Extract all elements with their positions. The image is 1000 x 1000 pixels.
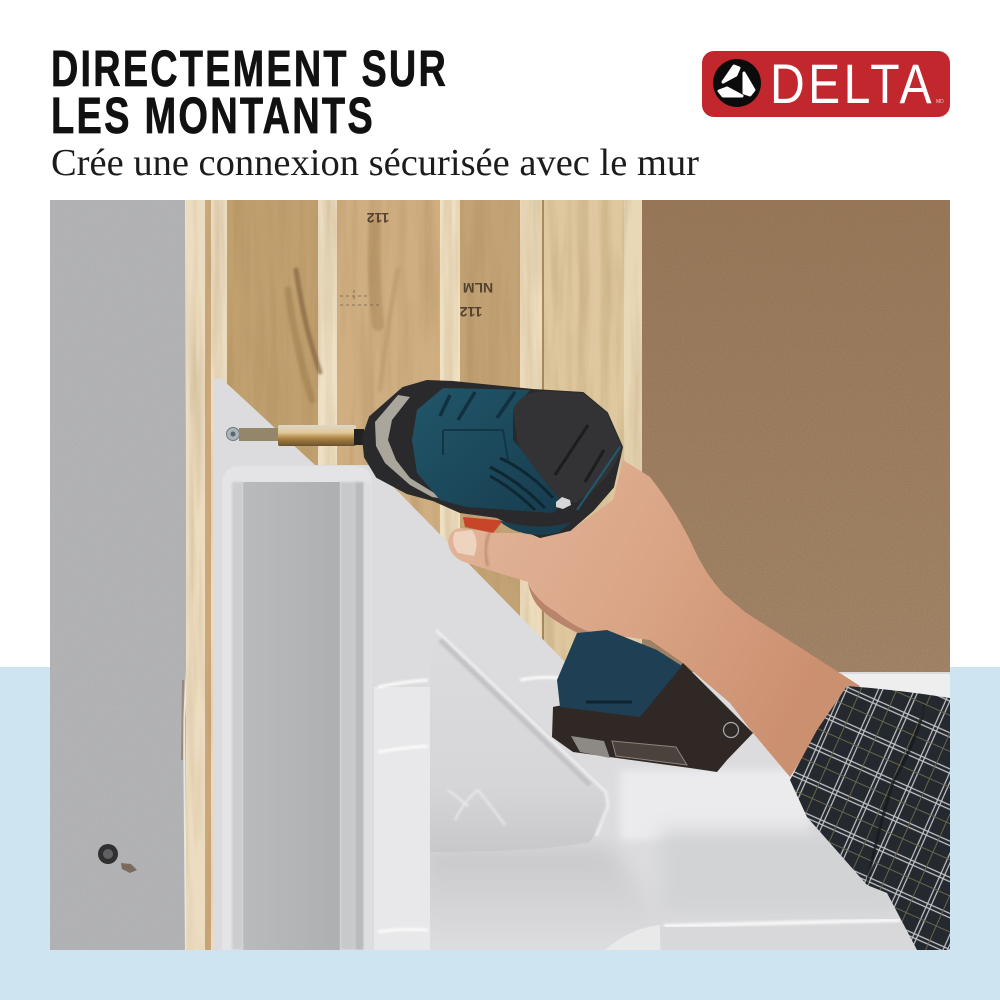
title: LES MONTANTS <box>51 87 375 144</box>
drywall screw <box>98 844 137 873</box>
title <box>51 40 448 144</box>
black rear cap <box>513 391 622 503</box>
tile highlight lines <box>378 677 560 932</box>
drywall panel <box>50 200 190 950</box>
plaid shirt sleeve <box>790 686 950 950</box>
stud stamp text: 112 <box>459 304 482 320</box>
screw on drill body <box>556 497 571 509</box>
logo: Delta <box>702 51 950 117</box>
background: pale blue band <box>0 667 1000 1000</box>
subtitle: Crée une connexion sécurisée avec le mur <box>51 142 699 184</box>
blue housing <box>412 388 563 513</box>
red trigger <box>463 517 502 533</box>
stud stamp text: 112 <box>366 210 389 226</box>
wall studs <box>186 200 642 950</box>
lower blue grip <box>498 520 572 535</box>
upper right white ledge <box>842 674 950 698</box>
diagonal shelf recess <box>430 630 632 904</box>
logo icon: Delta trefoil <box>713 59 761 107</box>
background: white top <box>0 0 1000 667</box>
battery power ring <box>724 722 738 738</box>
drill bit and screw <box>226 425 364 446</box>
photo: drill installing tub wall <box>50 200 950 960</box>
lower right ledges <box>605 770 918 950</box>
grey collar <box>375 395 444 499</box>
drill battery <box>552 630 753 772</box>
title: DIRECTEMENT SUR <box>51 40 448 97</box>
logo: Delta: MD <box>936 99 944 105</box>
forearm and hand <box>448 460 860 777</box>
impact drill body <box>363 381 622 537</box>
logo wordmark: DELTA <box>770 52 935 115</box>
vertical shelf <box>232 482 364 950</box>
stud stamp text <box>366 210 493 320</box>
brown wall board <box>642 200 950 672</box>
tub wall surround <box>213 378 950 960</box>
wood knots <box>288 222 398 400</box>
stud stamp text: NLM <box>463 280 493 296</box>
